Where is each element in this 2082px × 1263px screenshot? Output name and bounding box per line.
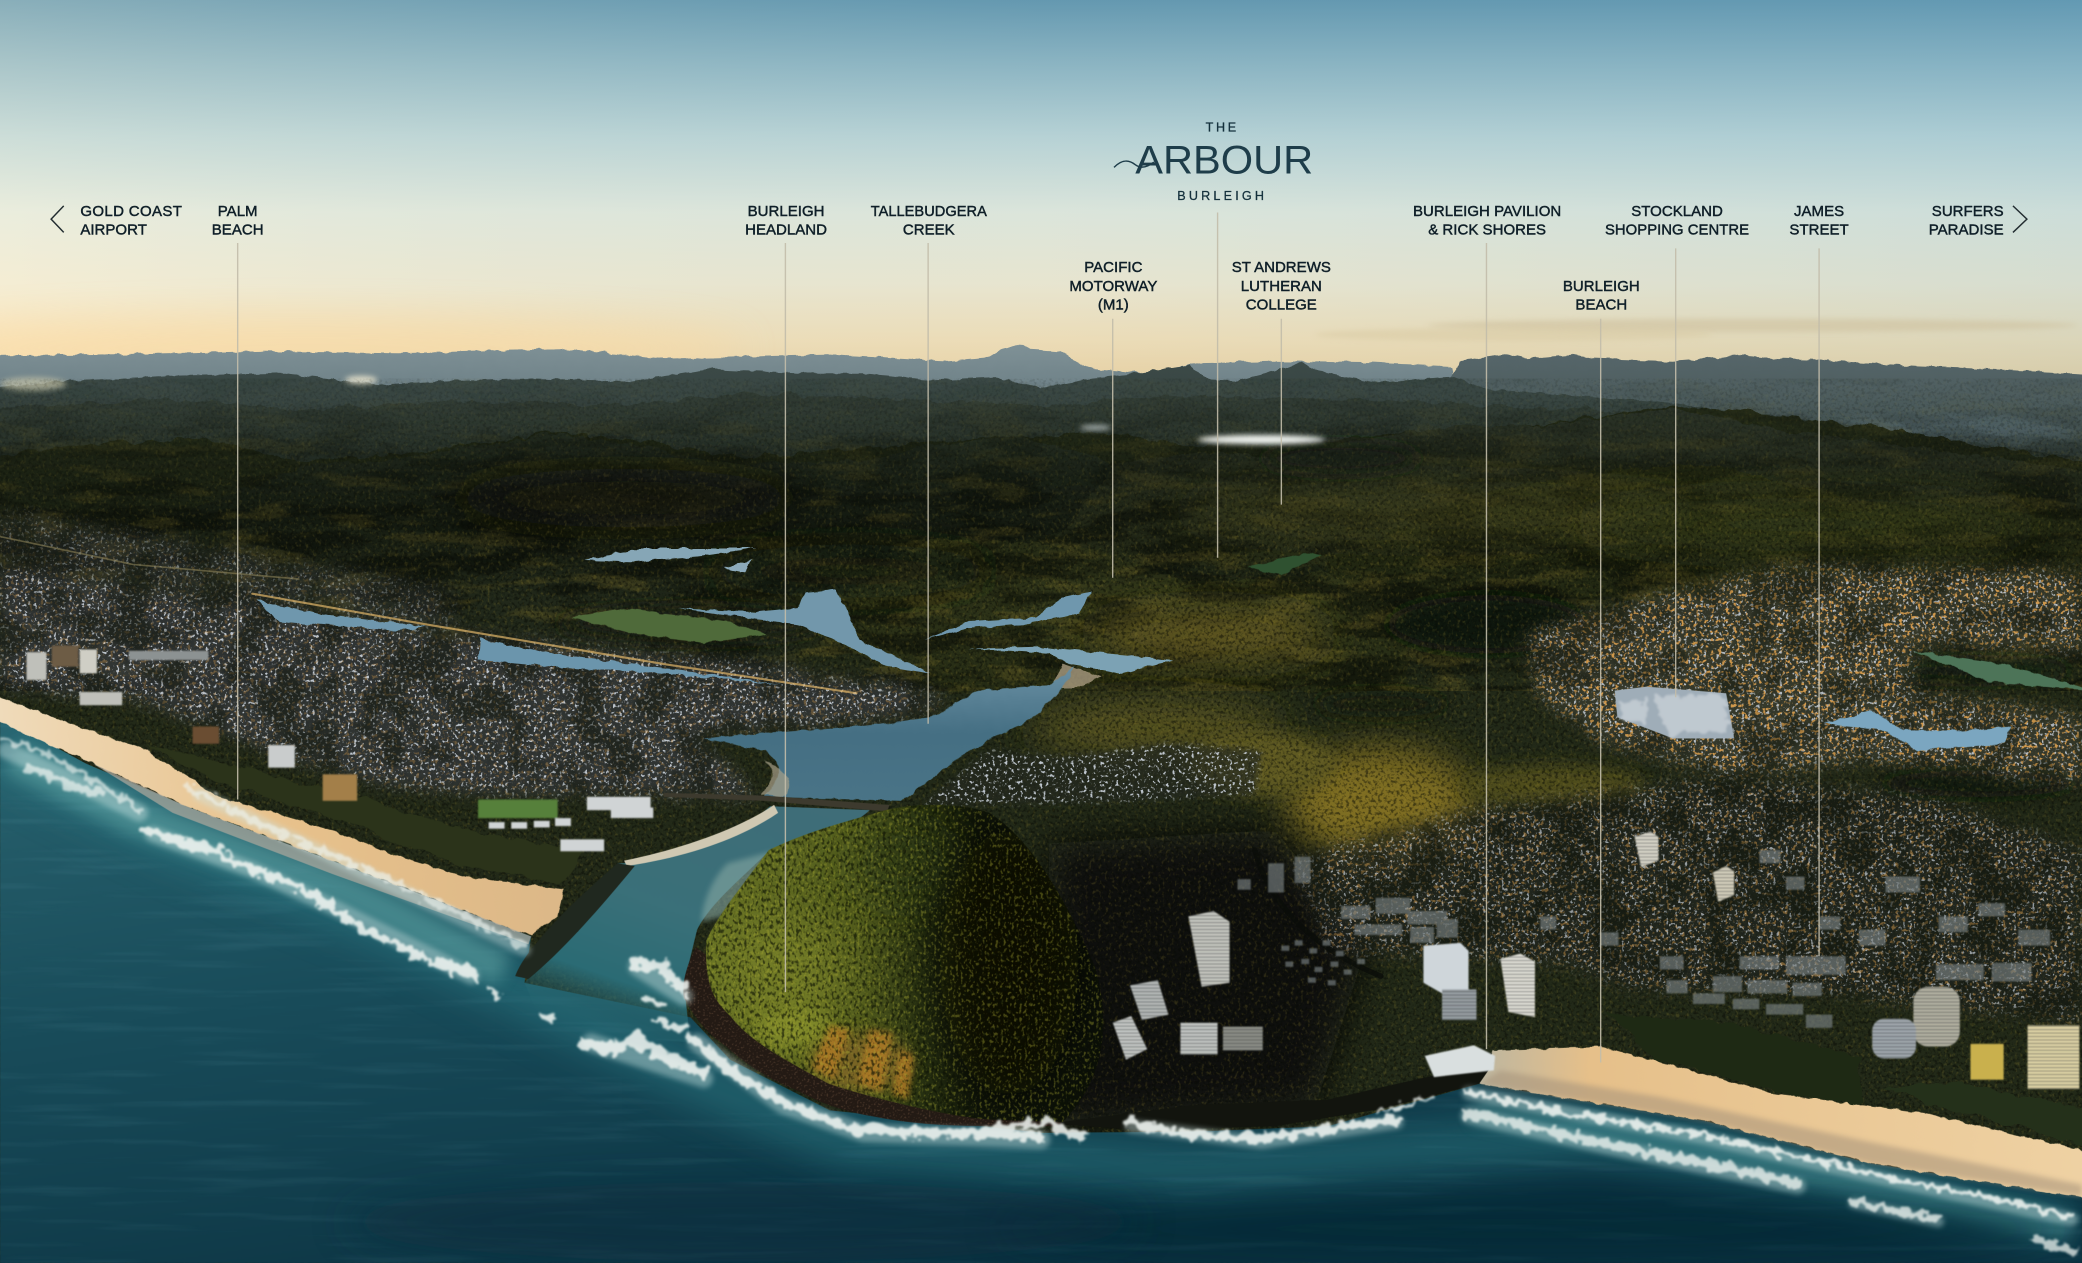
callout: James Street: JAMES [1794,203,1844,220]
shopping centre roof [1615,687,1734,738]
breakwater groyne [515,863,635,979]
callout: Pacific Motorway: (M1) [1098,296,1129,313]
surf and breaking waves [0,737,2074,1251]
callout: Pacific Motorway [1069,259,1157,578]
ocean [0,664,2082,1263]
callout: Burleigh Beach [1563,278,1640,1062]
callout: Gold Coast Airport: GOLD COAST [80,203,182,220]
callout: Gold Coast Airport [51,203,182,238]
callout: Tallebudgera Creek: CREEK [903,221,955,238]
main river [704,667,1076,801]
pines east of beach [1885,1082,2082,1147]
Burleigh Heads towers [1113,831,2079,1089]
north spit sand [624,805,778,866]
callout: St Andrews Lutheran College [1232,259,1331,505]
callout: Palm Beach: PALM [218,203,258,220]
foliage texture [0,379,2082,1263]
valley haze [0,376,2078,444]
callout: Pacific Motorway: PACIFIC [1084,259,1143,276]
callout: Burleigh Headland: BURLEIGH [748,203,825,220]
wet sand [93,764,531,944]
pointer: The Arbour site [1217,212,1219,558]
callout: Burleigh Headland [745,203,827,992]
pavilion building [1425,1045,1495,1077]
Burleigh Heads small buildings [1238,850,2050,1028]
callout: St Andrews Lutheran College: ST ANDREWS [1232,259,1331,276]
callout: St Andrews Lutheran College: COLLEGE [1246,296,1317,313]
soft surf haze [7,750,2071,1222]
callout: Burleigh Beach: BEACH [1575,296,1627,313]
callout: Tallebudgera Creek [871,203,987,724]
callout: Surfers Paradise: PARADISE [1929,221,2004,238]
callout: Stockland Shopping Centre [1605,203,1749,697]
callout: James Street [1789,203,1849,956]
golf course and green fields [571,552,2082,691]
logo: The Arbour Burleigh: ARBOUR [1135,138,1313,182]
logo: The Arbour Burleigh: THE [1206,120,1239,134]
inlet sand bar [701,851,773,922]
callout: Surfers Paradise: SURFERS [1932,203,2004,220]
western beach [0,693,564,936]
waterways [255,548,2010,801]
foothills [0,363,2082,584]
highway and foreshore glow [0,537,1381,976]
beach shadow [1479,1070,2082,1197]
Burleigh Heads town rooftops [1289,772,2082,1029]
distant mountain range [0,345,1453,452]
callout: Burleigh Pavilion and Rick Shores: & RICK SHORES [1428,221,1546,238]
callout: Gold Coast Airport: AIRPORT [80,221,147,238]
logo: The Arbour Burleigh: BURLEIGH [1177,189,1267,203]
surf club buildings [489,797,653,851]
Burleigh Headland [683,804,1104,1126]
hillside mist [1080,425,1325,444]
callout: Burleigh Beach: BURLEIGH [1563,278,1640,295]
callout: Palm Beach: BEACH [212,221,264,238]
logo: The Arbour Burleigh [1114,120,1313,203]
callout: Burleigh Headland: HEADLAND [745,221,827,238]
east suburb rooftops [1517,556,2082,795]
callout: Stockland Shopping Centre: SHOPPING CENTRE [1605,221,1749,238]
callout: Burleigh Pavilion and Rick Shores: BURLEIGH PAVILION [1413,203,1561,220]
sunlit and shaded slopes [451,442,2078,1129]
callout: James Street: STREET [1789,221,1849,238]
river bridge [664,793,890,811]
callout: Burleigh Pavilion and Rick Shores [1413,203,1561,1049]
callout: Palm Beach [212,203,264,800]
callout: St Andrews Lutheran College: LUTHERAN [1241,278,1322,295]
rocky shore [1049,1062,1494,1130]
callout: Tallebudgera Creek: TALLEBUDGERA [871,203,987,220]
west suburb rooftops [0,506,950,808]
sky [0,0,2082,379]
layered forest ridges [0,393,2082,1262]
beachfront sports field [478,800,558,818]
right mountain ridge [1441,355,2082,478]
eastern beach [1479,1047,2082,1199]
forested slope [706,805,1103,1122]
callout: Stockland Shopping Centre: STOCKLAND [1631,203,1723,220]
callout: Pacific Motorway: MOTORWAY [1069,278,1157,295]
coastal scrub [146,744,584,883]
callout: Surfers Paradise [1929,203,2027,238]
inlet water [524,806,870,1043]
north headland rooftops [924,740,1265,808]
Norfolk pines behind beach [1607,1012,1862,1105]
west coast high-rises [27,645,653,851]
forest folds on ranges [0,398,2082,664]
boulder apron [683,948,1061,1126]
